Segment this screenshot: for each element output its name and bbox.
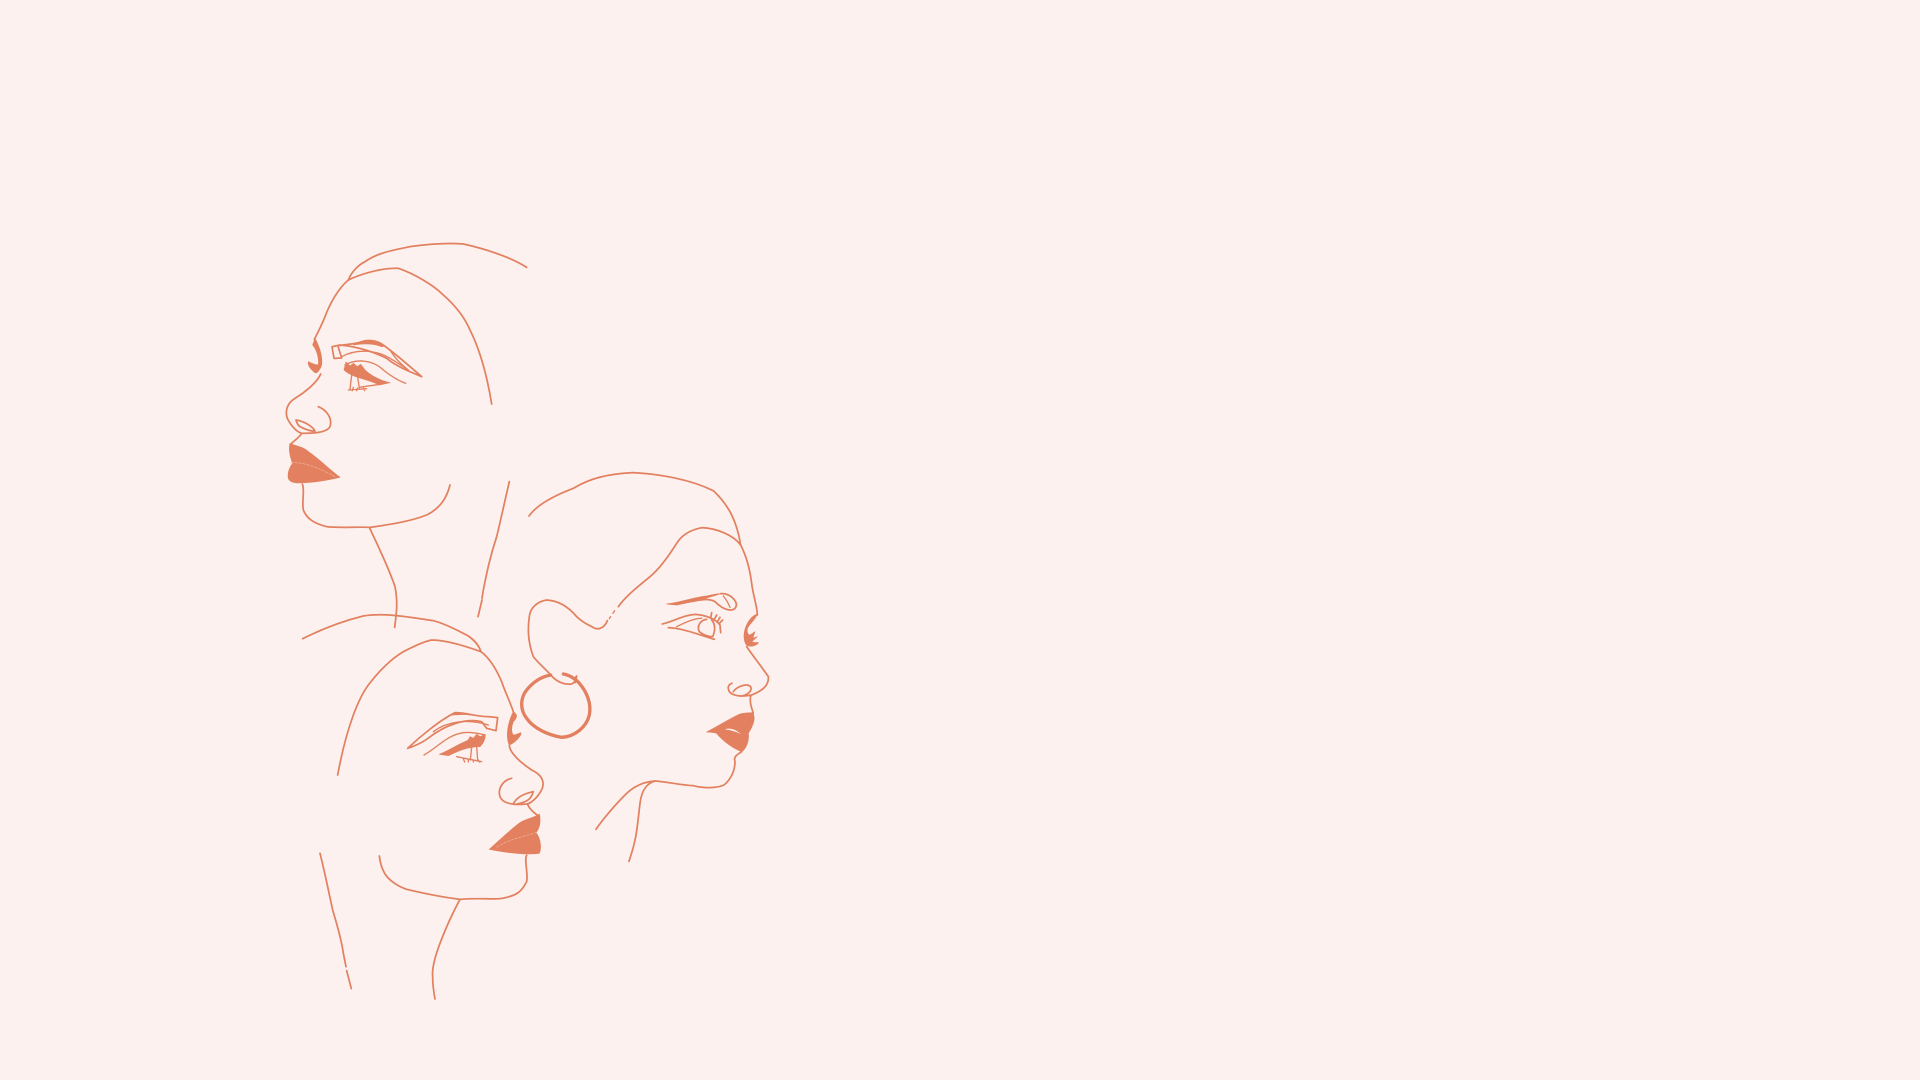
eye and brow bbox=[408, 713, 498, 762]
jaw and neck bbox=[320, 853, 527, 999]
jaw and neck bbox=[596, 752, 742, 861]
face: bottom woman looking right bbox=[303, 615, 543, 999]
jaw and neck bbox=[302, 482, 509, 627]
head and hair outlines bbox=[303, 615, 513, 775]
head, hairline and ear bbox=[528, 473, 757, 684]
lips bbox=[707, 713, 754, 752]
lips bbox=[489, 814, 541, 854]
lips bbox=[288, 443, 340, 483]
face: top woman looking left bbox=[286, 244, 527, 627]
face: right woman looking right with hoop earring bbox=[522, 473, 768, 861]
eye and brow bbox=[332, 340, 422, 391]
head and hair outlines bbox=[314, 244, 527, 404]
hoop earring bbox=[522, 674, 590, 737]
nose and brow shadow bbox=[499, 712, 543, 817]
nose and brow shadow bbox=[286, 338, 331, 443]
eye and brow bbox=[662, 594, 736, 639]
nose and brow shadow bbox=[728, 614, 768, 713]
